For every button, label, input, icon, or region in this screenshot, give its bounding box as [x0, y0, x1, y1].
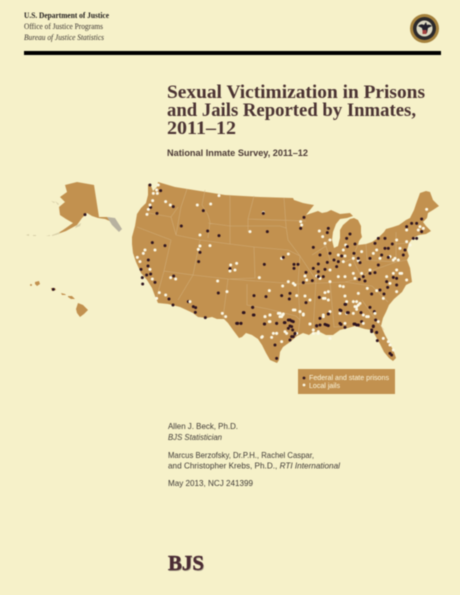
agency header	[24, 11, 109, 42]
map: federal and state prisons, gulf coast	[237, 304, 392, 358]
authors and publication date: Marcus Berzofsky, Dr.P.H., Rachel Caspar,	[168, 450, 314, 460]
map legend: Federal and state prisons	[309, 375, 389, 382]
agency header: Bureau of Justice Statistics	[24, 33, 104, 42]
title: 2011–12	[167, 118, 236, 139]
map: local jails, west	[137, 185, 237, 317]
map: local jails, east	[250, 209, 427, 337]
map: federal and state prisons, east	[237, 213, 422, 337]
map of the United States	[26, 182, 439, 363]
title: Sexual Victimization in Prisons	[167, 82, 425, 103]
map: Alaska	[26, 182, 122, 236]
icon: department seal	[410, 14, 439, 43]
authors and publication date: May 2013, NCJ 241399	[168, 478, 253, 488]
map legend	[298, 369, 395, 394]
BJS logo: BJS	[168, 551, 204, 575]
map legend: Local jails	[309, 383, 340, 390]
map: state borders	[137, 189, 409, 335]
authors and publication date: and Christopher Krebs, Ph.D., RTI International	[168, 460, 341, 470]
subtitle: National Inmate Survey, 2011–12	[167, 148, 308, 158]
authors and publication date	[168, 421, 341, 488]
BJS logo: BJS	[169, 552, 205, 576]
map: local jails, gulf coast	[262, 303, 393, 350]
map: Hawaii	[30, 281, 88, 317]
map: federal and state prisons, west	[53, 185, 238, 323]
map: contiguous states	[132, 182, 439, 363]
title: and Jails Reported by Inmates,	[167, 100, 416, 121]
title	[167, 82, 425, 139]
authors and publication date: Allen J. Beck, Ph.D.	[168, 421, 238, 431]
header rule	[24, 51, 441, 55]
agency header: U.S. Department of Justice	[24, 11, 109, 20]
agency header: Office of Justice Programs	[24, 22, 103, 31]
authors and publication date: BJS Statistician	[168, 432, 222, 442]
